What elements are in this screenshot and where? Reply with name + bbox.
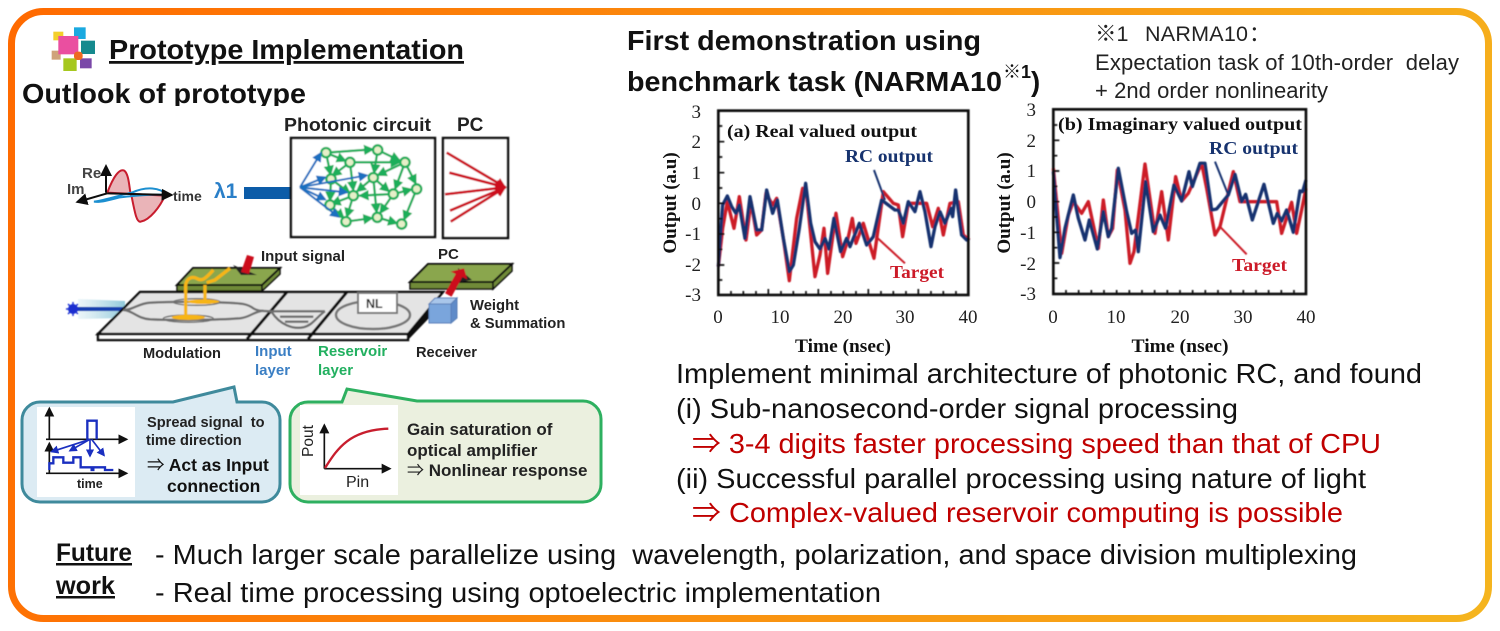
text: gain saturation: optical amplifier <box>407 441 538 460</box>
label: Re: Re <box>82 165 101 182</box>
conclusions text block: (i) Sub-nanosecond-order signal processing <box>676 393 1238 424</box>
red input arrow <box>233 255 257 275</box>
icon: coloured squares logo <box>52 27 95 71</box>
chart a panel title: (a) Real valued output <box>727 121 917 142</box>
label: PC top: PC <box>438 246 459 263</box>
chip platform <box>98 292 443 340</box>
y tick labels: 2 <box>1026 131 1036 152</box>
text: gain saturation: Gain saturation of <box>407 420 553 439</box>
y tick labels: 3 <box>692 102 701 123</box>
y axis title: Output (a.u) <box>660 152 681 254</box>
y tick labels: 0 <box>1026 192 1036 213</box>
label: Receiver: Receiver <box>416 344 477 361</box>
label: Modulation: Modulation <box>143 345 221 362</box>
note: NARMA10 definition: NARMA10 <box>1145 22 1248 46</box>
y tick labels: -1 <box>685 224 701 245</box>
x tick labels: 10 <box>770 307 790 328</box>
chart b panel title: (b) Imaginary valued output <box>1058 114 1302 135</box>
conclusions text block: ⇒ 3-4 digits faster processing speed than that of CPU <box>692 428 1381 459</box>
text: act as input connection: ⇒ Act as Input <box>147 455 269 475</box>
x tick labels: 0 <box>1048 307 1058 328</box>
y tick labels: 1 <box>1026 161 1036 182</box>
diagram: PC box with red arrows <box>443 138 508 238</box>
reservoir ring with NL box: NL <box>366 297 383 311</box>
future work list <box>155 539 1357 608</box>
diagram: photonic circuit box <box>291 138 435 237</box>
note: NARMA10 definition: ※1 <box>1095 22 1128 46</box>
text: spread signal: Spread signal to <box>147 415 265 431</box>
label: Weight & Summation: & Summation <box>470 316 565 332</box>
x tick labels: 40 <box>958 307 978 328</box>
note: NARMA10 definition <box>1095 22 1459 103</box>
note: NARMA10 definition: + 2nd order nonlinearity <box>1095 78 1328 103</box>
heading: Future work: Future <box>56 539 132 567</box>
RC output label: RC output <box>845 146 933 166</box>
heading: First demonstration <box>627 25 1040 97</box>
future work list: - Much larger scale parallelize using wavelength, polarization, and space division multiplexing <box>155 539 1357 570</box>
label: Input layer: Input <box>255 343 292 360</box>
target curve <box>1053 163 1306 263</box>
conclusions text block <box>676 358 1422 528</box>
text: spread signal: time direction <box>146 433 242 449</box>
y tick labels: -2 <box>685 255 701 276</box>
label: time axis: time <box>77 477 103 491</box>
label: Pout: Pout <box>300 424 317 457</box>
gain saturation mini chart <box>324 425 390 469</box>
conclusions text block: ⇒ Complex-valued reservoir computing is possible <box>692 497 1343 528</box>
RC output curve <box>1053 163 1306 258</box>
note: NARMA10 definition: ： <box>1249 22 1271 46</box>
label: time: time <box>173 188 202 204</box>
x axis title: Time (nsec) <box>1132 336 1228 357</box>
heading: First demonstration: benchmark task (NARMA10 <box>627 66 1002 97</box>
y axis title: Output (a.u) <box>994 152 1015 254</box>
spread signal mini chart <box>46 408 127 473</box>
x tick labels: 30 <box>1234 307 1252 328</box>
heading: Future work <box>55 539 132 600</box>
y tick labels: 1 <box>692 163 701 184</box>
Target label: Target <box>1232 255 1287 275</box>
y tick labels: 3 <box>1026 100 1036 121</box>
label: PC: PC <box>457 115 484 136</box>
label: Reservoir layer: Reservoir <box>318 343 387 360</box>
heading: First demonstration: First demonstration using <box>627 25 981 56</box>
y tick labels: -3 <box>1020 284 1036 305</box>
x tick labels: 20 <box>1170 307 1190 328</box>
x tick labels: 20 <box>834 307 852 328</box>
text: gain saturation: ⇒ Nonlinear response <box>407 461 587 480</box>
PC board <box>410 264 512 295</box>
label: Input signal: Input signal <box>261 248 345 265</box>
heading: First demonstration: ) <box>1031 66 1040 97</box>
Target label: Target <box>890 262 944 282</box>
heading: Outlook of prototype: Outlook of prototype <box>22 78 306 109</box>
diagram: chip stack with modulation, input, reservoir and receiver <box>66 255 512 340</box>
diagram: complex signal waveform <box>77 166 172 222</box>
conclusions text block: (ii) Successful parallel processing using nature of light <box>676 463 1366 494</box>
x tick labels: 30 <box>896 307 914 328</box>
RC output label: RC output <box>1209 138 1298 158</box>
label: Pin: Pin <box>346 474 369 491</box>
note: NARMA10 definition: Expectation task of 10th-order delay <box>1095 50 1459 75</box>
label: Weight & Summation: Weight <box>470 298 519 314</box>
chart: imaginary valued output <box>994 100 1316 357</box>
light beam <box>66 299 125 319</box>
x axis title: Time (nsec) <box>795 336 891 357</box>
text: act as input connection: connection <box>167 476 260 496</box>
y tick labels: 0 <box>692 194 701 215</box>
y tick labels: -3 <box>685 285 701 306</box>
heading: Future work: work <box>55 572 115 600</box>
reservoir ring with NL box <box>336 293 410 329</box>
y tick labels: -1 <box>1020 223 1036 244</box>
label: Reservoir layer: layer <box>318 362 353 379</box>
x tick labels: 0 <box>713 307 723 328</box>
RC output curve <box>718 183 969 272</box>
x tick labels: 40 <box>1296 307 1316 328</box>
chart: real valued output <box>660 102 978 357</box>
light input bar <box>244 187 291 199</box>
callout: input connection <box>22 387 280 502</box>
waveguides <box>123 299 325 328</box>
x tick labels: 10 <box>1106 307 1126 328</box>
heading: Prototype Implementation: Prototype Implementation <box>109 34 464 65</box>
label: lambda 1: λ1 <box>214 180 238 203</box>
receiver cube <box>429 298 457 323</box>
label: Input layer: layer <box>255 362 290 379</box>
heading: First demonstration: ※1 <box>1003 62 1031 82</box>
target curve <box>718 188 969 281</box>
y tick labels: 2 <box>692 132 701 153</box>
conclusions text block: Implement minimal architecture of photonic RC, and found <box>676 358 1422 389</box>
future work list: - Real time processing using optoelectric implementation <box>155 577 881 608</box>
label: Photonic circuit: Photonic circuit <box>284 114 431 135</box>
callout: nonlinear response <box>290 389 601 502</box>
y tick labels: -2 <box>1020 254 1036 275</box>
label: Im: Im <box>67 181 85 198</box>
electrodes board <box>172 268 280 320</box>
